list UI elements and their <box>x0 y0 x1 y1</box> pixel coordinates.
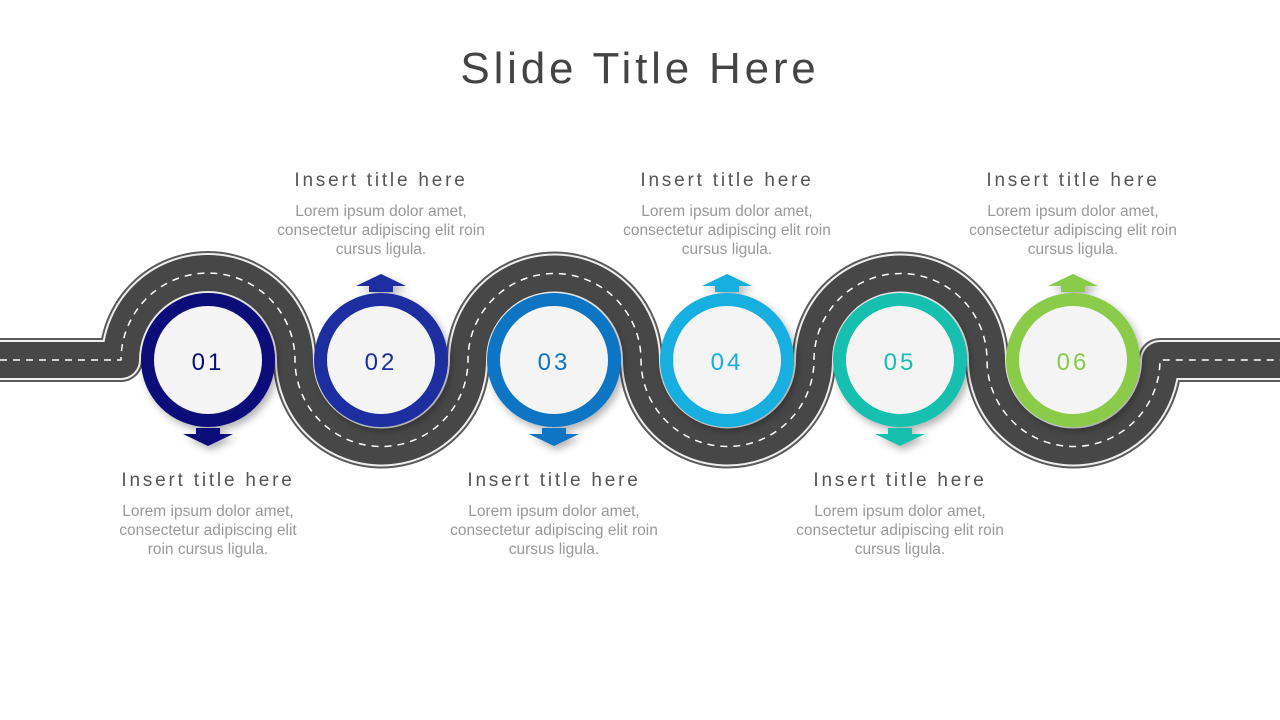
text: step 05 <box>796 470 1004 558</box>
title: Slide Title Here <box>460 44 820 93</box>
text: step 03: Lorem ipsum dolor amet, <box>468 503 640 520</box>
text: step 03: Insert title here <box>467 470 641 491</box>
step 03 <box>487 293 621 446</box>
text: step 04 <box>623 170 831 258</box>
step 06 <box>1006 274 1140 427</box>
text: step 06: Lorem ipsum dolor amet, <box>987 203 1159 220</box>
text: step 02: Lorem ipsum dolor amet, <box>295 203 467 220</box>
text: step 01: Lorem ipsum dolor amet, <box>122 503 294 520</box>
step 01: 01 <box>192 349 224 376</box>
step 04: 04 <box>711 349 743 376</box>
text: step 06: cursus ligula. <box>1028 241 1118 258</box>
text: step 01 <box>119 470 297 558</box>
text: step 02: Insert title here <box>294 170 468 191</box>
step 05 <box>833 293 967 446</box>
text: step 04: consectetur adipiscing elit roin <box>623 222 831 239</box>
step 04 <box>660 274 794 427</box>
text: step 05: Lorem ipsum dolor amet, <box>814 503 986 520</box>
step 05: 05 <box>884 349 916 376</box>
text: step 04: Insert title here <box>640 170 814 191</box>
text: step 03: consectetur adipiscing elit roin <box>450 522 658 539</box>
text: step 06: Insert title here <box>986 170 1160 191</box>
step 03: 03 <box>538 349 570 376</box>
text: step 04: cursus ligula. <box>682 241 772 258</box>
text: step 05: consectetur adipiscing elit roin <box>796 522 1004 539</box>
text: step 01: Insert title here <box>121 470 295 491</box>
text: step 03: cursus ligula. <box>509 541 599 558</box>
text: step 02: cursus ligula. <box>336 241 426 258</box>
text: step 06 <box>969 170 1177 258</box>
text: step 03 <box>450 470 658 558</box>
step 02 <box>314 274 448 427</box>
text: step 01: roin cursus ligula. <box>148 541 268 558</box>
road <box>0 273 1280 446</box>
text: step 05: cursus ligula. <box>855 541 945 558</box>
text: step 01: consectetur adipiscing elit <box>119 522 297 539</box>
step 01 <box>141 293 275 446</box>
text: step 02: consectetur adipiscing elit roin <box>277 222 485 239</box>
text: step 02 <box>277 170 485 258</box>
step 06: 06 <box>1057 349 1089 376</box>
text: step 05: Insert title here <box>813 470 987 491</box>
text: step 06: consectetur adipiscing elit roin <box>969 222 1177 239</box>
text: step 04: Lorem ipsum dolor amet, <box>641 203 813 220</box>
step 02: 02 <box>365 349 397 376</box>
